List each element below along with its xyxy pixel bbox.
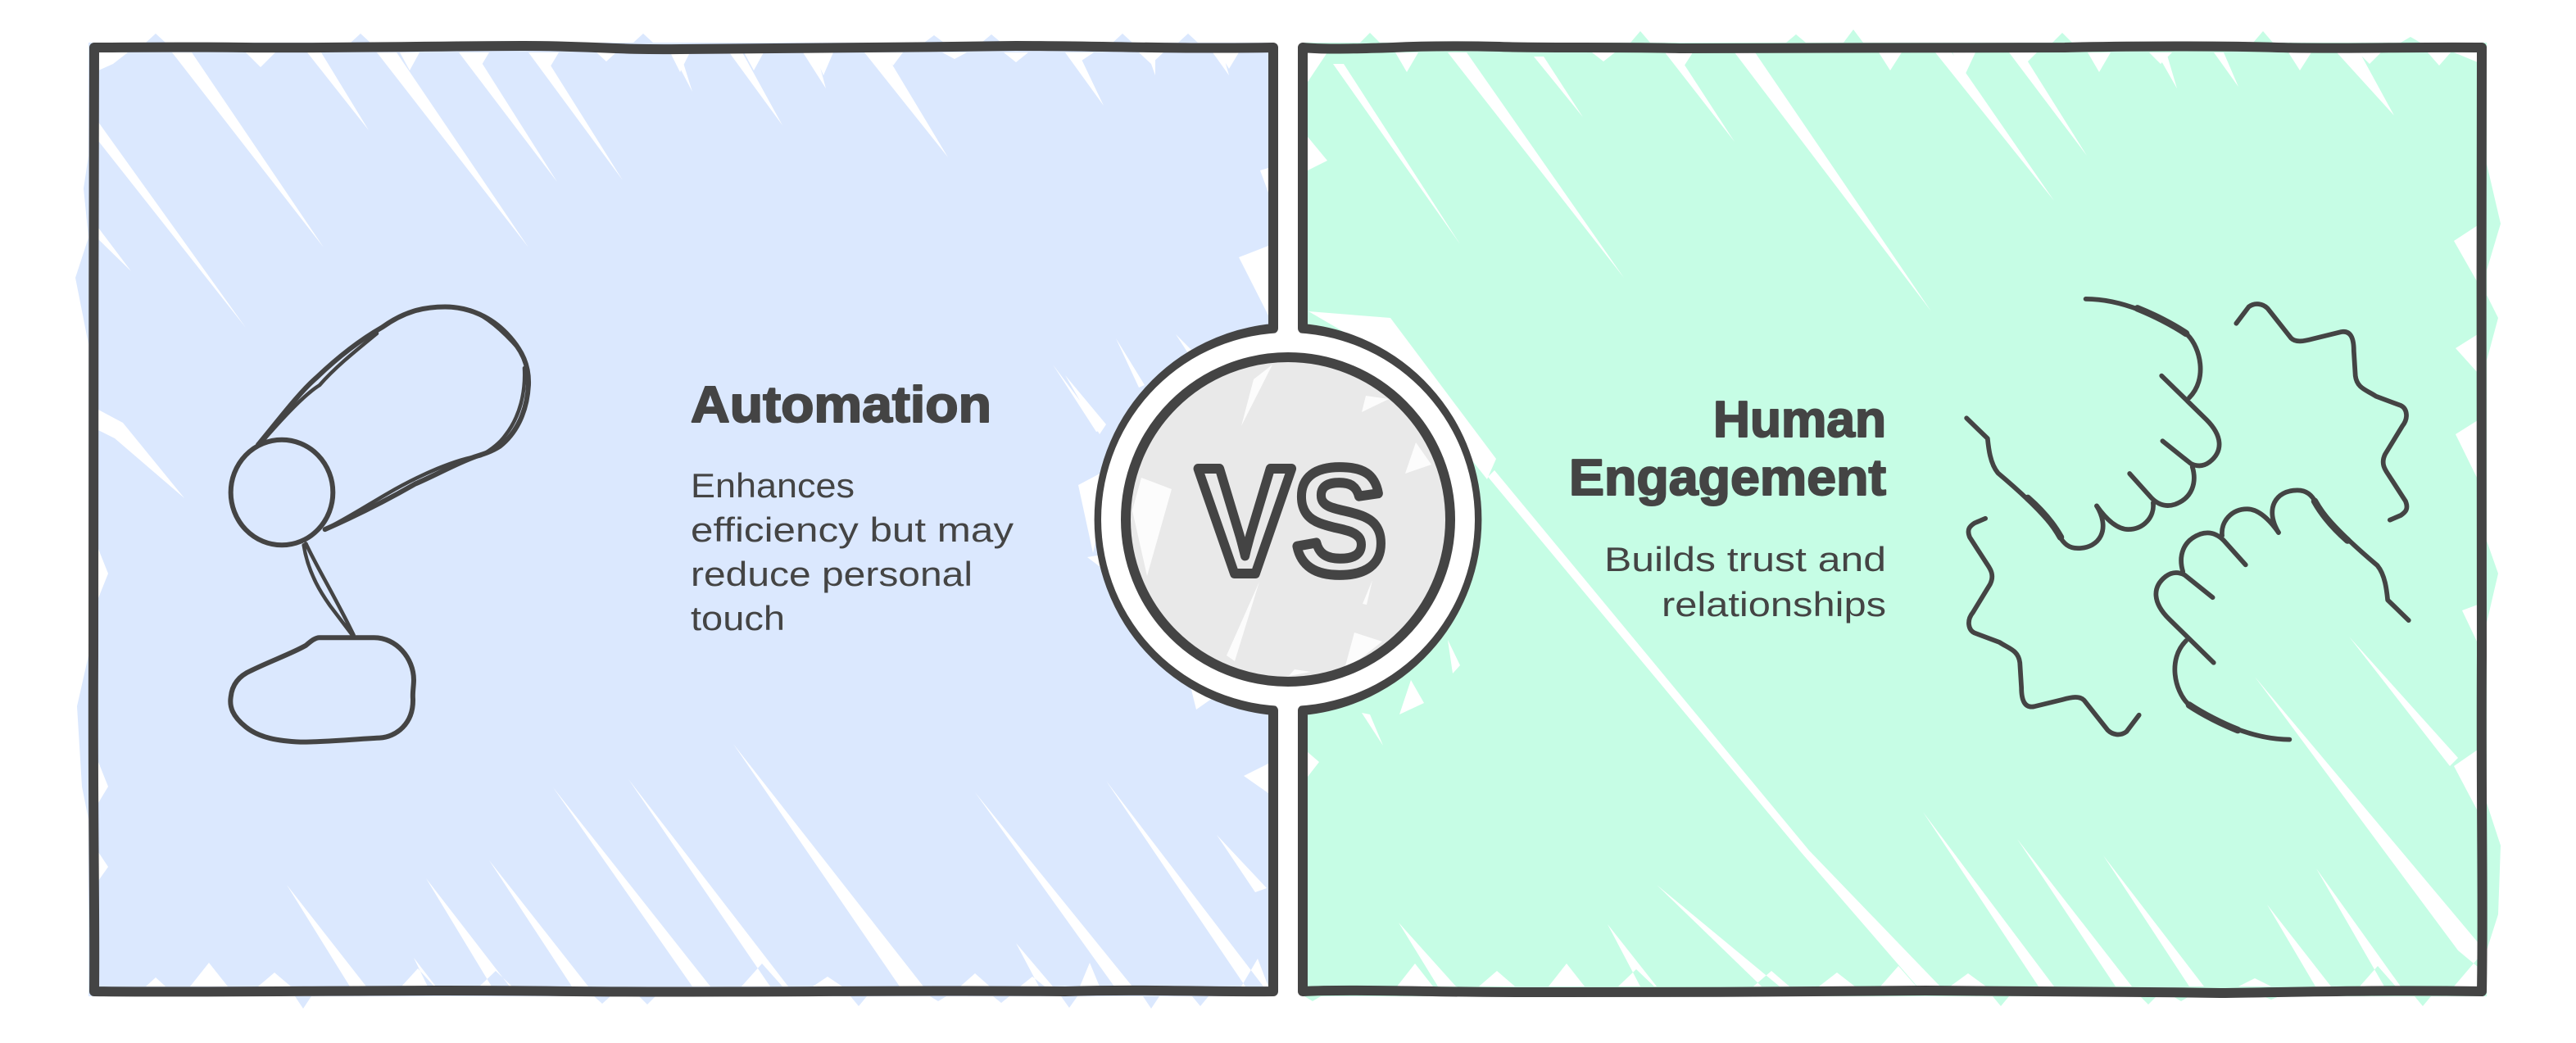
heading: human engagement: Engagement <box>1569 450 1886 506</box>
panel fill: blue hachure <box>75 34 1273 1009</box>
panel: human engagement <box>1303 29 2501 1006</box>
top hand <box>1966 299 2220 548</box>
text block: automation description: reduce personal <box>691 555 973 593</box>
panel frame: human engagement <box>1303 46 2483 993</box>
heading: human engagement: Human <box>1713 392 1886 448</box>
robot stem <box>304 543 354 635</box>
text block: human engagement description: Builds trust and <box>1604 540 1886 578</box>
panel: automation <box>75 34 1273 1009</box>
badge white band <box>1101 333 1475 706</box>
badge: VS circle <box>1101 333 1475 706</box>
robot joint <box>231 440 333 545</box>
panel frame: automation <box>93 46 1273 992</box>
heading: automation: Automation <box>691 377 991 433</box>
robot base <box>230 637 414 742</box>
text block: human engagement description: relationships <box>1662 585 1886 624</box>
icon: handshake <box>1966 299 2409 740</box>
label: VS: S <box>1293 435 1386 606</box>
text block: automation description: touch <box>691 599 785 637</box>
text block: automation description <box>691 466 1014 637</box>
heading: human engagement <box>1569 392 1886 506</box>
top right cuff <box>2236 304 2407 520</box>
icon: robot arm <box>230 306 528 742</box>
label: VS <box>1197 435 1386 606</box>
text block: automation description: efficiency but may <box>691 510 1014 549</box>
label: VS: V <box>1197 437 1293 606</box>
robot upper arm outline <box>258 306 528 529</box>
badge inner disc <box>1126 357 1450 682</box>
text block: automation description: Enhances <box>691 466 855 505</box>
bottom hand <box>2156 490 2409 740</box>
text block: human engagement description <box>1604 540 1886 624</box>
bottom left cuff <box>1968 519 2139 734</box>
badge inner ring <box>1126 357 1450 682</box>
panel fill: green hachure <box>1303 29 2501 1006</box>
